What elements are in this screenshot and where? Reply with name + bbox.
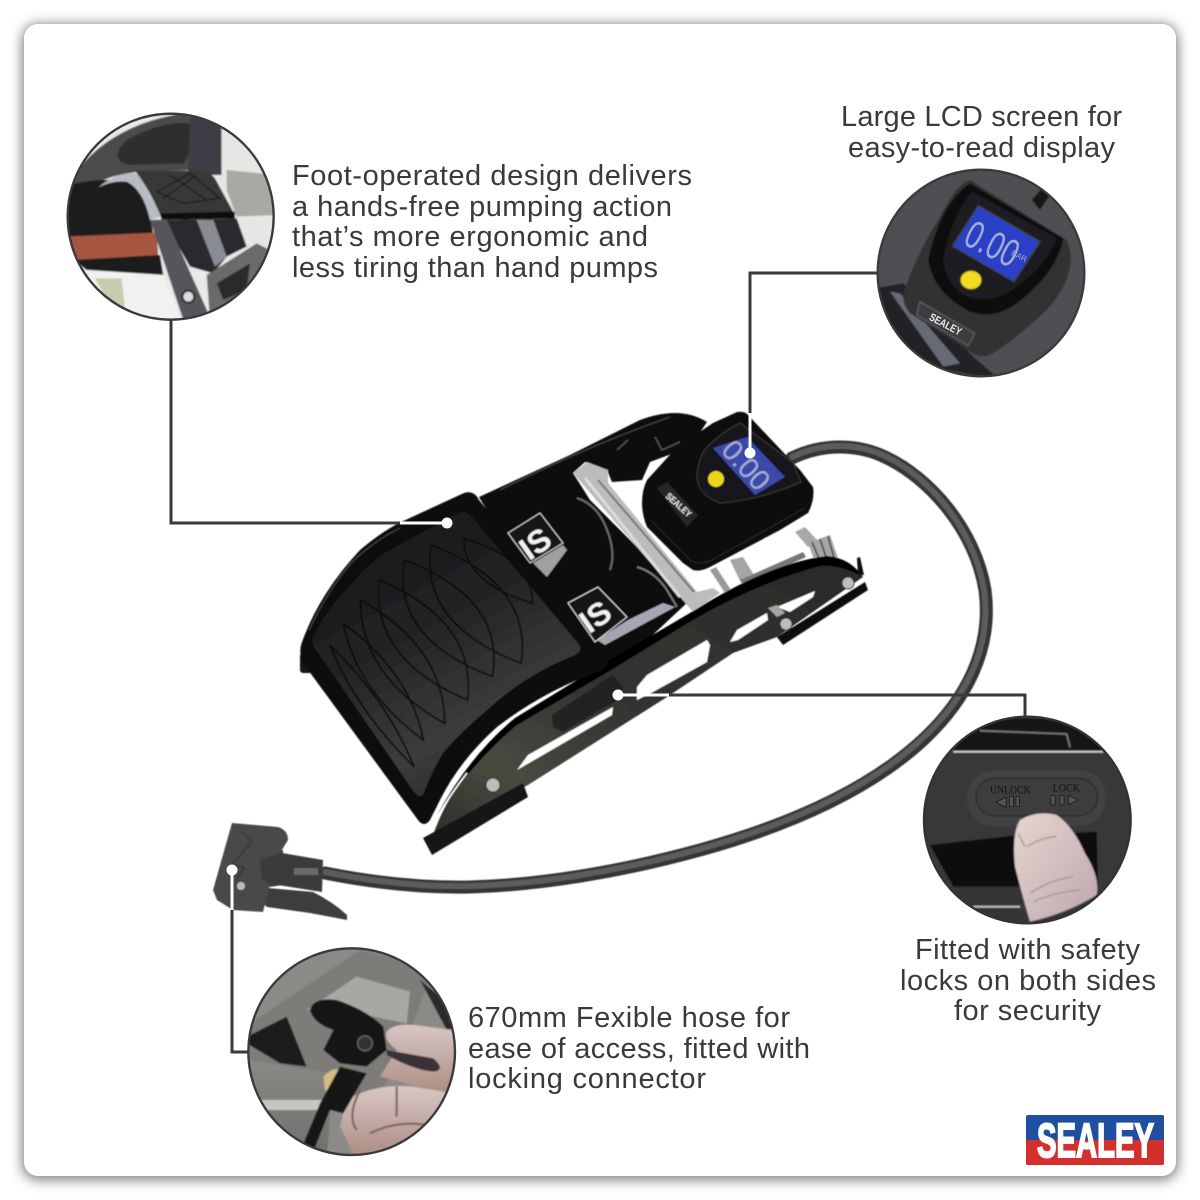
connector neck [258, 850, 283, 888]
side plate [432, 560, 863, 838]
cylinder label rear [508, 513, 563, 563]
text: foot-operated design: that’s more ergonomic and [292, 221, 648, 253]
white rim highlight [437, 773, 467, 817]
text: foot-operated design: a hands-free pumping action [292, 191, 672, 223]
glossy rim over plate [437, 556, 863, 815]
rear cylinder [508, 498, 612, 593]
gauge face [697, 423, 801, 503]
white leader ends and dots [227, 413, 755, 910]
foot pump product: IS [513, 520, 558, 567]
LCD digits detail: 0.00 [958, 212, 1027, 276]
plate slots [517, 591, 815, 770]
detail circle: safety lock [922, 716, 1132, 924]
text: LCD screen [841, 101, 1122, 164]
text: LCD screen: easy-to-read display [848, 132, 1116, 164]
gauge label text: SEALEY [663, 491, 694, 520]
text: flexible hose: 670mm Fexible hose for [468, 1002, 790, 1034]
rear foot [777, 582, 868, 645]
rods and spring [710, 527, 838, 593]
text: flexible hose [468, 1002, 810, 1095]
text: LCD screen: Large LCD screen for [841, 101, 1122, 133]
LCD digits: 0.00 [715, 434, 776, 497]
plate brand: SEALEY [927, 311, 964, 339]
detail circle: foot pedal [66, 112, 275, 321]
connector head [213, 823, 347, 920]
front foot [423, 783, 528, 855]
pedal rubber pad [312, 512, 580, 796]
text: foot-operated design: Foot-operated design delivers [292, 160, 692, 192]
gauge housing [642, 412, 813, 571]
text: flexible hose: locking connector [468, 1063, 706, 1095]
pedal stub [300, 653, 312, 673]
foot pump product [300, 412, 868, 855]
leader lines [171, 273, 1025, 1052]
pump interior and back frame [479, 413, 707, 675]
LCD screen [713, 437, 785, 495]
yellow button [708, 471, 724, 487]
text: foot-operated design: less tiring than hand pumps [292, 252, 658, 284]
back hook [857, 557, 864, 575]
LCD unit: BAR [1010, 248, 1029, 264]
pedal outer shell [300, 492, 607, 824]
screws [486, 577, 854, 792]
safety lock button [552, 675, 623, 732]
air hose [325, 446, 986, 887]
rear rod through slot [768, 605, 785, 617]
text: safety locks: Fitted with safety [915, 934, 1140, 966]
lock label right: LOCK [1053, 781, 1080, 795]
text: safety locks: for security [954, 995, 1102, 1027]
connector collar [276, 852, 323, 892]
text: safety locks [900, 934, 1156, 1027]
text: flexible hose: ease of access, fitted with [468, 1033, 810, 1065]
pedal tread pattern [330, 538, 533, 767]
detail circle: LCD screen [876, 168, 1086, 378]
silver cross bar [573, 462, 720, 612]
front cylinder [568, 567, 677, 648]
connector lever [257, 888, 347, 920]
gauge label plate [657, 482, 698, 527]
text: foot-operated design [292, 160, 692, 284]
lock labels: UNLOCK [990, 782, 1031, 796]
detail circle: hose connector [243, 947, 460, 1160]
cylinder label front [568, 587, 627, 642]
connector body [213, 823, 288, 912]
text: safety locks: locks on both sides [900, 965, 1156, 997]
foot pump product: IS [573, 593, 618, 640]
